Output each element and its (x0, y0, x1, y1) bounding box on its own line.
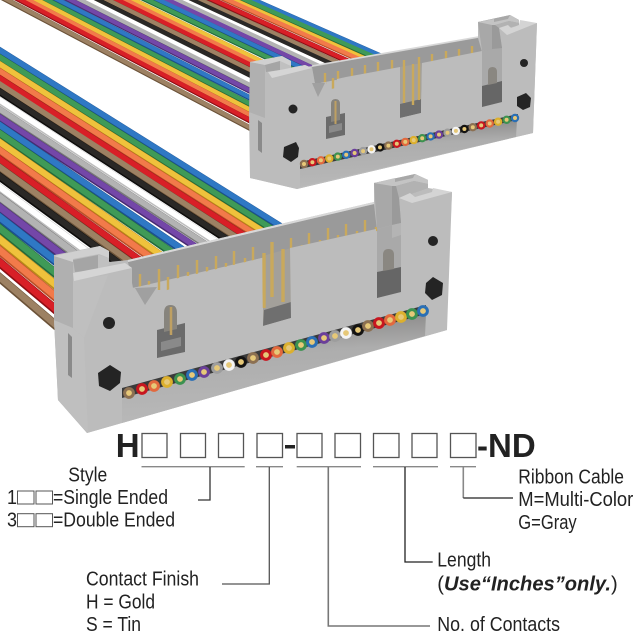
text: style: 3 (7, 510, 17, 532)
text: length (437, 550, 618, 596)
text: style: Style (68, 465, 107, 487)
text: ribbon cable: Ribbon Cable (518, 466, 624, 488)
text: style: 1 (7, 487, 17, 509)
front wire ends (125, 307, 427, 397)
text: length: Length (437, 550, 491, 572)
connector: front header (54, 174, 452, 433)
icon: front mounting holes (98, 236, 443, 391)
text: ribbon cable: G=Gray (518, 512, 577, 534)
text: number of contacts: No. of Contacts (437, 614, 560, 636)
part number code (116, 427, 536, 464)
rear wire ends (301, 115, 518, 167)
text: style: =Single Ended (53, 487, 168, 509)
text: style: =Double Ended (53, 510, 175, 532)
text: style (7, 465, 175, 532)
text: ribbon cable (518, 466, 634, 534)
text: contact finish: H = Gold (86, 591, 155, 613)
text: contact finish: S = Tin (86, 614, 141, 636)
text: contact finish (86, 569, 199, 636)
text: contact finish: Contact Finish (86, 569, 199, 591)
underlines and leader lines (142, 467, 513, 626)
ribbon cable: front connector (0, 44, 295, 329)
text: ribbon cable: M=Multi-Color (518, 489, 634, 511)
connector: rear header (249, 15, 537, 189)
ribbon cable: rear connector (0, 0, 385, 133)
text: length: (Use“Inches”only.) (437, 574, 618, 596)
part number code: -ND (477, 427, 536, 464)
icon: rear mounting holes (283, 59, 531, 162)
part number code: H (116, 427, 140, 464)
